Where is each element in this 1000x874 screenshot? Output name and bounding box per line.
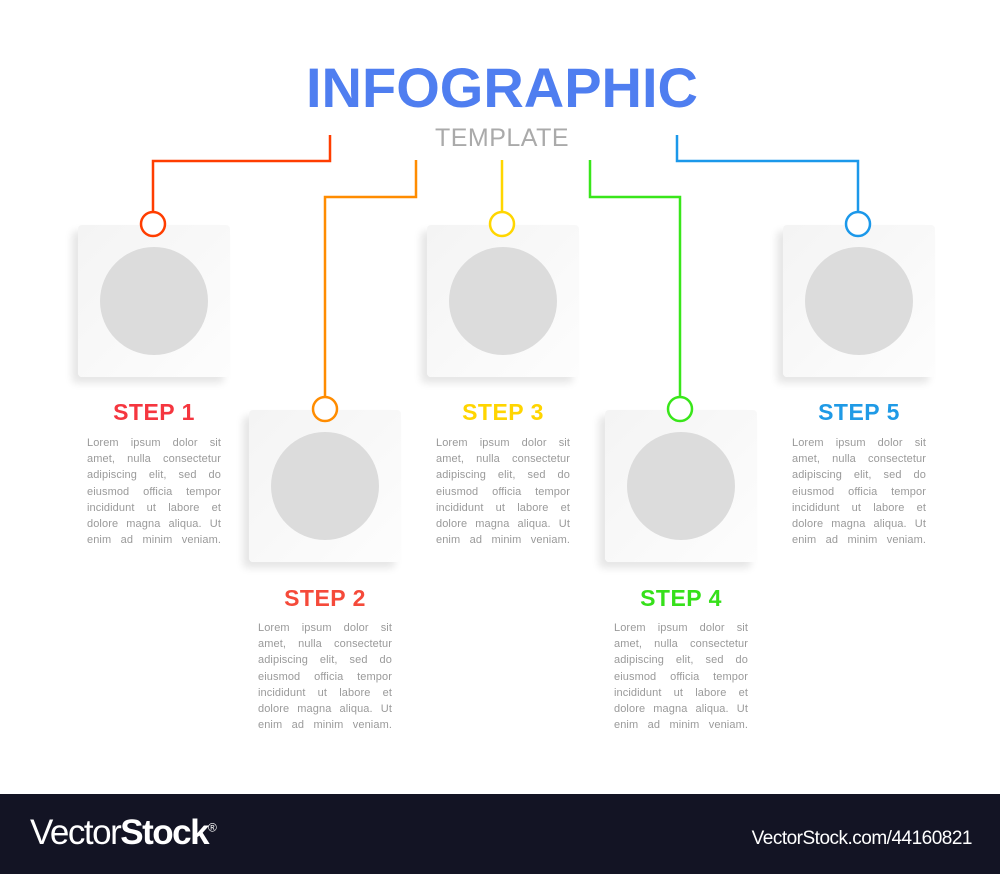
card 1 <box>78 225 230 377</box>
step 4 text: Lorem ipsum dolor sit amet, nulla consectetur adipiscing elit, sed do eiusmod officia tempor incididunt ut labore et dolore magna aliqua. Ut enim ad minim veniam. <box>614 622 748 731</box>
title: INFOGRAPHIC <box>306 56 698 119</box>
footer bar <box>0 794 1000 874</box>
step 1 text: Lorem ipsum dolor sit amet, nulla consectetur adipiscing elit, sed do eiusmod officia tempor incididunt ut labore et dolore magna aliqua. Ut enim ad minim veniam. <box>87 437 221 546</box>
step 4 label: STEP 4 <box>640 585 722 611</box>
footer url: VectorStock.com/44160821 <box>752 828 972 849</box>
subtitle: TEMPLATE <box>435 124 569 152</box>
card 4 <box>605 410 757 562</box>
footer logo: VectorStock® <box>30 813 215 852</box>
card 3 <box>427 225 579 377</box>
step 5 text: Lorem ipsum dolor sit amet, nulla consectetur adipiscing elit, sed do eiusmod officia tempor incididunt ut labore et dolore magna aliqua. Ut enim ad minim veniam. <box>792 437 926 546</box>
step 1 label: STEP 1 <box>113 399 195 425</box>
step 3 label: STEP 3 <box>462 399 544 425</box>
step 3 text: Lorem ipsum dolor sit amet, nulla consectetur adipiscing elit, sed do eiusmod officia tempor incididunt ut labore et dolore magna aliqua. Ut enim ad minim veniam. <box>436 437 570 546</box>
step 2 text: Lorem ipsum dolor sit amet, nulla consectetur adipiscing elit, sed do eiusmod officia tempor incididunt ut labore et dolore magna aliqua. Ut enim ad minim veniam. <box>258 622 392 731</box>
card 5 <box>783 225 935 377</box>
step 5 label: STEP 5 <box>818 399 900 425</box>
card 2 <box>249 410 401 562</box>
step 2 label: STEP 2 <box>284 585 366 611</box>
